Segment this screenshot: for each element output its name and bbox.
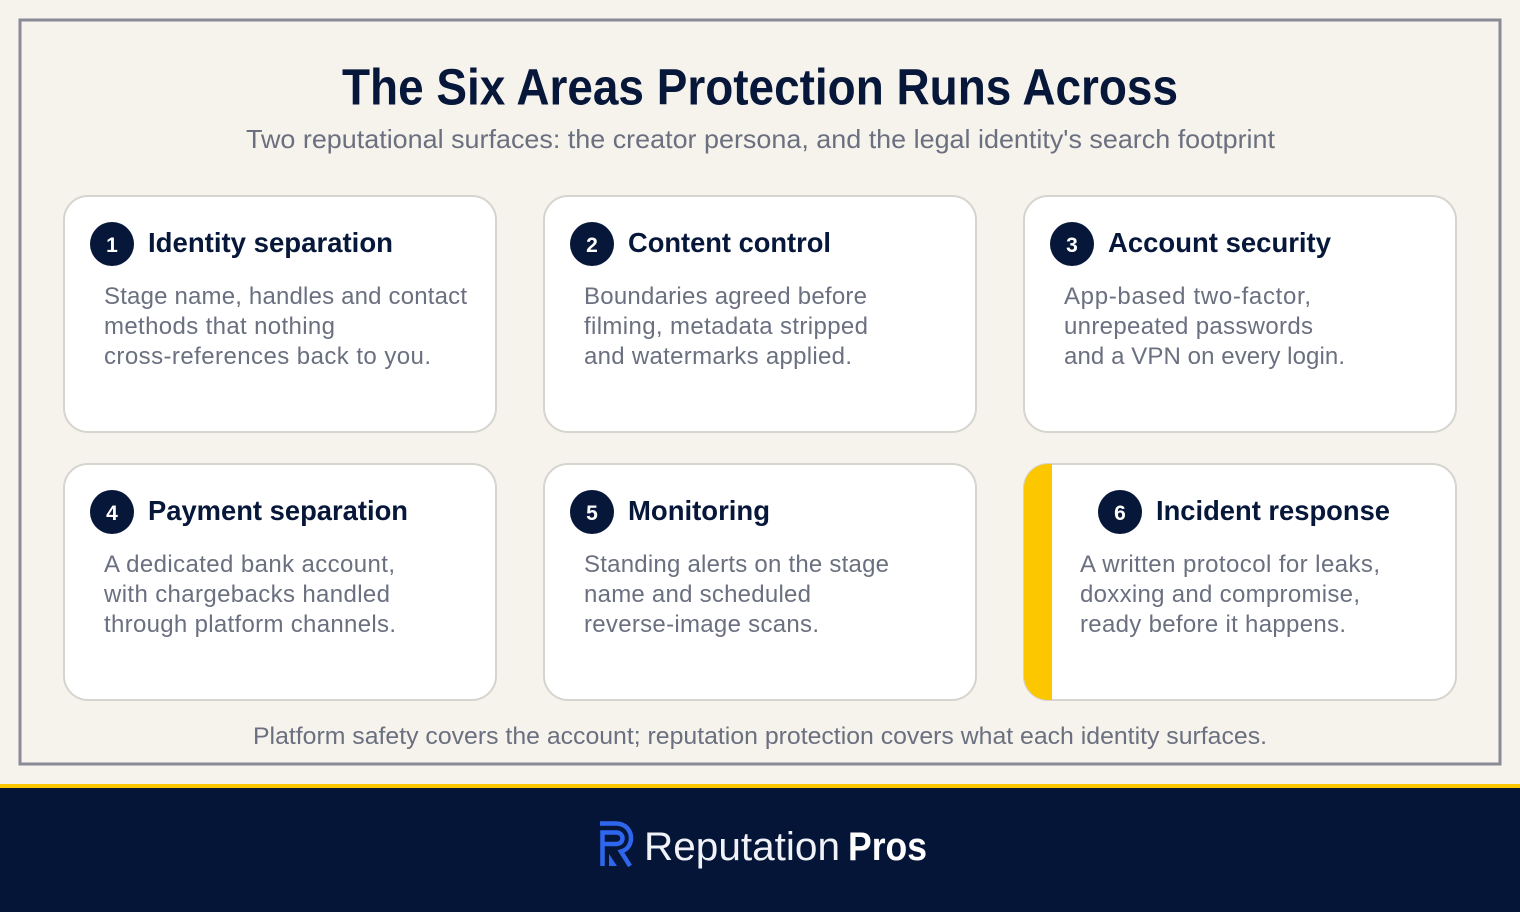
logo wordmark: Reputation bbox=[644, 825, 840, 869]
description bbox=[1080, 551, 1380, 638]
heading: Account security bbox=[1108, 227, 1331, 258]
description bbox=[1064, 283, 1345, 370]
panel: identity separation bbox=[64, 196, 496, 432]
heading: Payment separation bbox=[148, 495, 408, 526]
badge 1 bbox=[90, 222, 134, 266]
description: name and scheduled bbox=[584, 581, 811, 608]
panel: account security bbox=[1024, 196, 1456, 432]
description: Boundaries agreed before bbox=[584, 283, 867, 310]
badge 2 bbox=[570, 222, 614, 266]
description: unrepeated passwords bbox=[1064, 313, 1313, 340]
description: cross-references back to you. bbox=[104, 343, 431, 370]
badge 3: 3 bbox=[1066, 234, 1078, 257]
badge 6: 6 bbox=[1114, 502, 1126, 525]
description: doxxing and compromise, bbox=[1080, 581, 1360, 608]
title: The Six Areas Protection Runs Across bbox=[342, 58, 1178, 116]
heading: Identity separation bbox=[148, 227, 393, 258]
icon: R logo mark bbox=[600, 824, 631, 866]
description: and watermarks applied. bbox=[584, 343, 852, 370]
badge 5: 5 bbox=[586, 502, 598, 525]
badge 6 bbox=[1098, 490, 1142, 534]
description bbox=[103, 551, 396, 638]
heading: Monitoring bbox=[628, 495, 770, 526]
description: A written protocol for leaks, bbox=[1080, 551, 1380, 578]
badge 5 bbox=[570, 490, 614, 534]
panel: incident response (highlighted) bbox=[1024, 464, 1456, 700]
badge 2: 2 bbox=[586, 234, 598, 257]
panel: content control bbox=[544, 196, 976, 432]
logo wordmark: Pros bbox=[848, 825, 927, 869]
footer band bbox=[0, 784, 1520, 912]
subtitle: Two reputational surfaces: the creator persona, and the legal identity's search footprint bbox=[246, 124, 1276, 154]
description: Standing alerts on the stage bbox=[584, 551, 889, 578]
description: and a VPN on every login. bbox=[1064, 343, 1345, 370]
caption: Platform safety covers the account; reputation protection covers what each identity surfaces. bbox=[253, 723, 1267, 750]
description bbox=[584, 283, 868, 370]
heading: Incident response bbox=[1156, 495, 1390, 526]
content frame bbox=[20, 20, 1500, 764]
description: App-based two-factor, bbox=[1064, 283, 1311, 310]
panel: payment separation bbox=[64, 464, 496, 700]
badge 4 bbox=[90, 490, 134, 534]
description: ready before it happens. bbox=[1080, 611, 1346, 638]
badge 3 bbox=[1050, 222, 1094, 266]
panel: monitoring bbox=[544, 464, 976, 700]
description: Stage name, handles and contact bbox=[104, 283, 467, 310]
description: methods that nothing bbox=[104, 313, 335, 340]
description: through platform channels. bbox=[104, 611, 396, 638]
description bbox=[104, 283, 467, 370]
description: A dedicated bank account, bbox=[104, 551, 395, 578]
description: with chargebacks handled bbox=[103, 581, 390, 608]
badge 4: 4 bbox=[106, 502, 118, 525]
yellow accent bar bbox=[1024, 464, 1052, 700]
description: reverse-image scans. bbox=[584, 611, 819, 638]
description bbox=[584, 551, 889, 638]
heading: Content control bbox=[628, 227, 831, 258]
description: filming, metadata stripped bbox=[584, 313, 868, 340]
badge 1: 1 bbox=[106, 234, 118, 257]
